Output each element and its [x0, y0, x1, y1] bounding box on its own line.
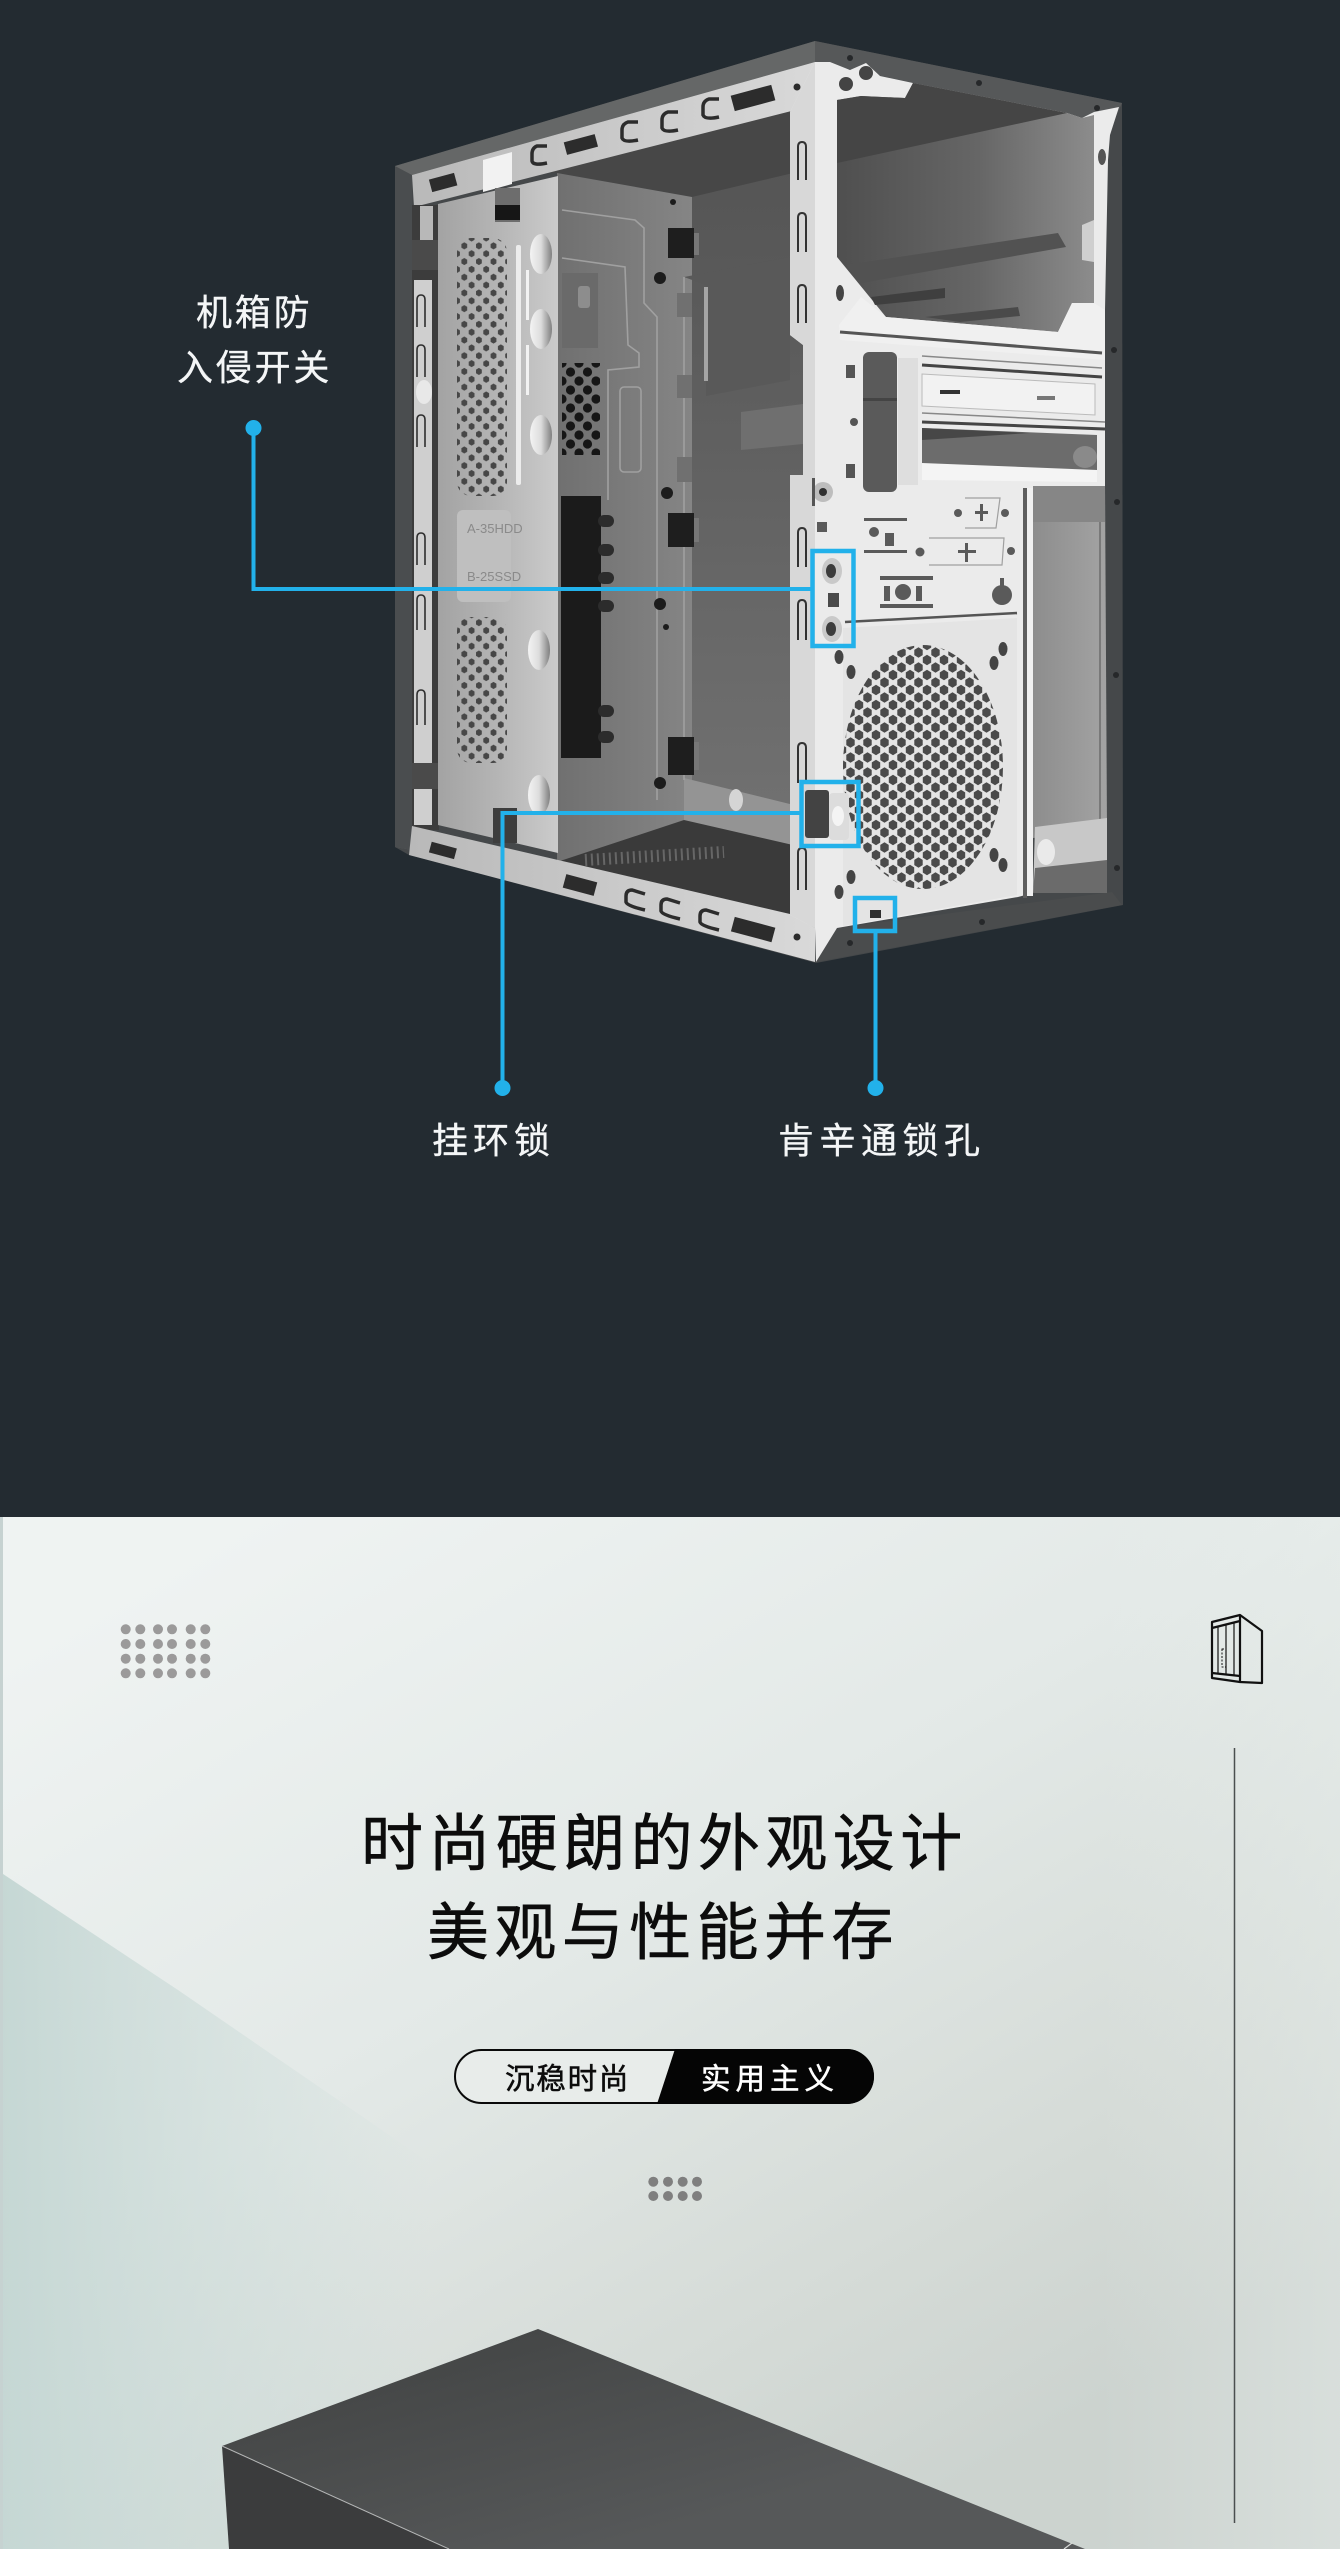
front I/O plates and knockouts — [812, 478, 1017, 622]
interior: ceiling, walls and floor — [540, 100, 806, 925]
embossed drive labels: B-25SSD — [467, 569, 521, 584]
product box corner — [222, 2329, 1085, 2549]
rear bay opening — [1023, 486, 1107, 898]
panel: light design section — [0, 1517, 1340, 2549]
back wall connectors — [668, 228, 699, 775]
tray honeycomb vents — [457, 238, 507, 763]
vertical rule — [1234, 1748, 1236, 2523]
fan honeycomb vent — [834, 618, 1017, 926]
callout: padlock ring — [432, 782, 858, 1161]
pill tag — [455, 2049, 874, 2104]
chassis outer shell — [395, 41, 1123, 963]
padlock hasp — [805, 790, 849, 840]
pill tag: 实用主义 — [701, 2063, 839, 2096]
tray mounting bosses — [528, 234, 552, 815]
dot grid: top left — [121, 1624, 210, 1678]
drive tray — [438, 176, 558, 853]
title: 时尚硬朗的外观设计 — [361, 1810, 968, 1879]
title — [361, 1810, 968, 1968]
chassis illustration — [395, 41, 1123, 963]
icon: computer case outline — [1212, 1615, 1262, 1683]
label: kensington lock: 肯辛通锁孔 — [778, 1120, 986, 1161]
label: intrusion switch — [177, 292, 332, 388]
embossed drive labels: A-35HDD — [467, 521, 523, 536]
top rail — [412, 62, 815, 207]
kensington slot — [870, 910, 881, 918]
front panel white frame — [790, 62, 1119, 962]
column slots — [798, 142, 806, 890]
panel: dark chassis section — [0, 0, 1340, 1517]
top window showing chassis interior — [836, 66, 1106, 332]
bottom rail — [409, 826, 815, 962]
label: padlock ring: 挂环锁 — [432, 1120, 555, 1161]
title: 美观与性能并存 — [427, 1899, 899, 1968]
left strip with slots and clips — [412, 205, 445, 830]
label: intrusion switch: 机箱防 — [196, 292, 312, 333]
motherboard bracket and black standoff column — [561, 273, 614, 758]
drive bay with ribs — [839, 297, 1105, 492]
intrusion switch bosses — [822, 558, 842, 642]
callout: kensington lock — [778, 898, 986, 1161]
label: intrusion switch: 入侵开关 — [177, 347, 332, 388]
pill tag: 沉稳时尚 — [505, 2063, 630, 2096]
dot grid: centre — [648, 2177, 702, 2201]
embossed drive labels — [467, 521, 523, 584]
callout: intrusion switch — [177, 292, 854, 646]
